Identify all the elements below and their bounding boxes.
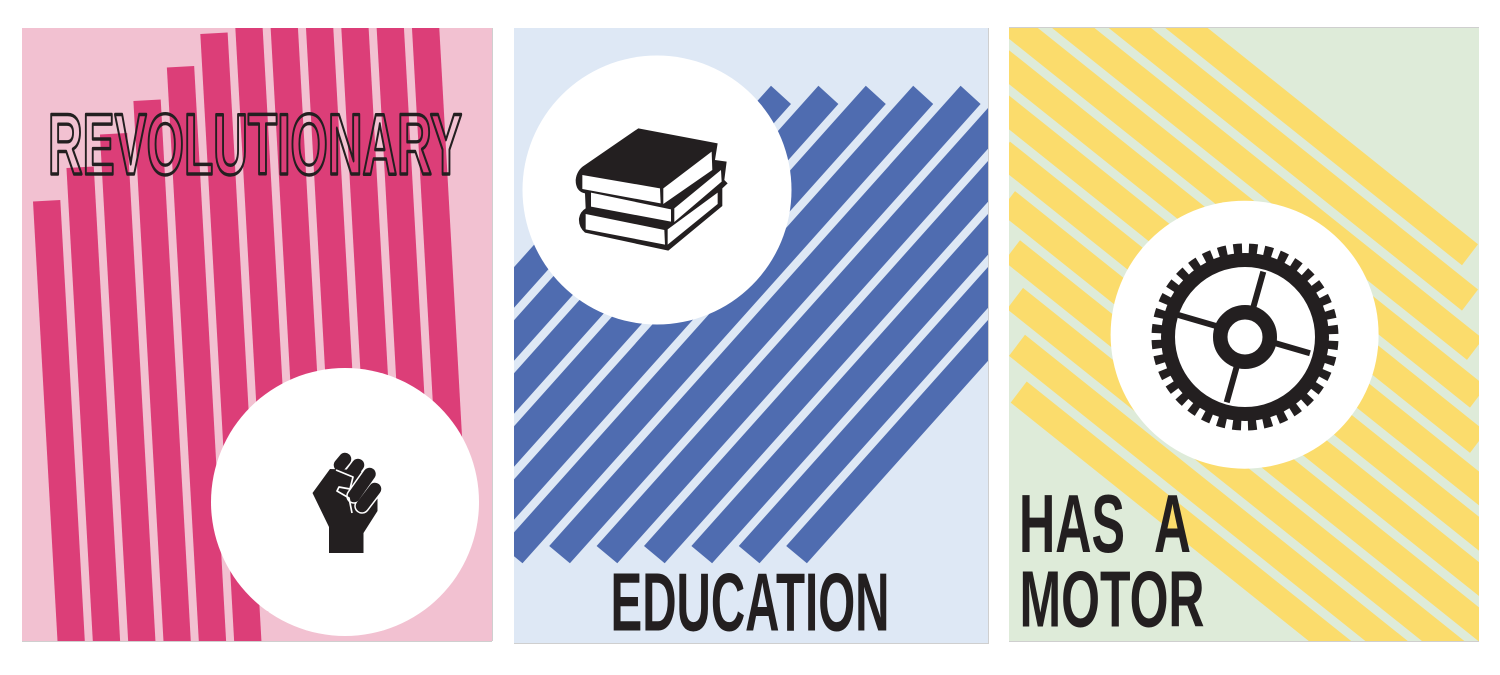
heading: HAS A: A [1154, 477, 1191, 570]
heading: MOTOR: MOTOR [1020, 554, 1204, 644]
yellow diagonal bars [1009, 28, 1479, 641]
panel background: light blue [514, 28, 989, 643]
panel: education [514, 28, 988, 643]
panel: revolutionary [22, 20, 492, 650]
icon: raised fist [312, 459, 378, 553]
heading: REVOLUTIONARY outlined: REVOLUTIONARY [48, 97, 462, 193]
white circle [1111, 201, 1379, 469]
white circle [211, 368, 479, 636]
heading: HAS A: HAS [1019, 477, 1125, 570]
blue diagonal bars [514, 86, 988, 564]
pink slanted stair-step bars [33, 20, 463, 650]
panel: has a motor [1009, 28, 1479, 641]
panel background: pink [22, 28, 492, 641]
white circle [522, 56, 792, 324]
icon: gear [1153, 245, 1337, 429]
heading: EDUCATION: EDUCATION [610, 556, 890, 648]
icon: stack of books [576, 128, 728, 251]
panel background: light green [1009, 28, 1479, 641]
